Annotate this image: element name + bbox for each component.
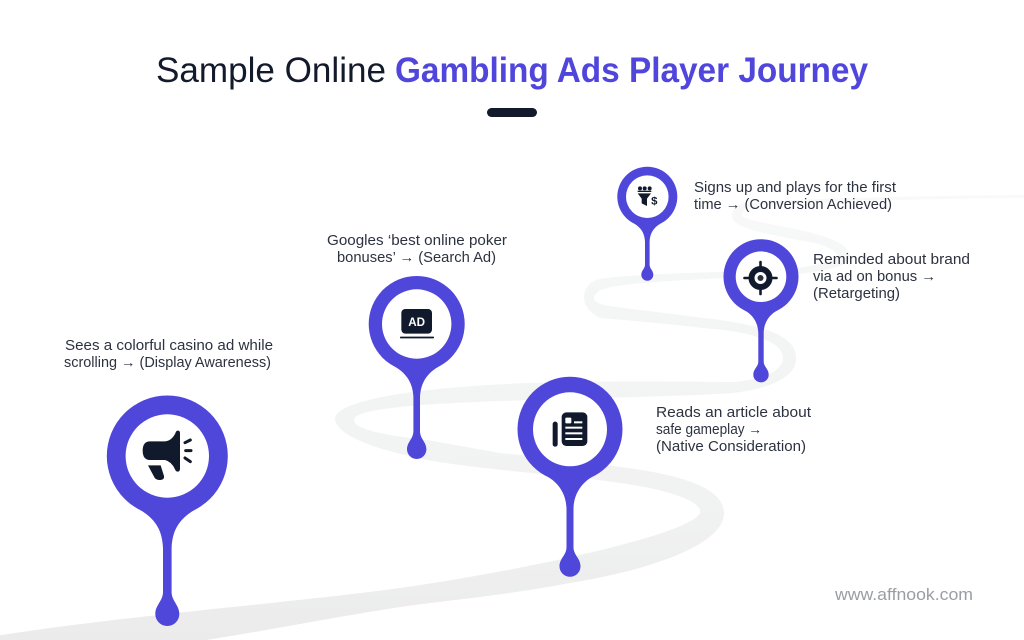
pin 3: native consideration: [518, 377, 622, 577]
title underline bar: [487, 108, 537, 117]
text: search ad: bonuses’ → (Search Ad): [337, 250, 496, 266]
pin 2: search ad: [369, 276, 465, 459]
text: display awareness: scrolling → (Display Awareness): [64, 355, 271, 371]
icon: newspaper: [553, 412, 587, 447]
text: display awareness: Sees a colorful casino ad while: [65, 338, 273, 354]
text: search ad: [327, 233, 507, 266]
icon: AD laptop: AD: [408, 316, 425, 329]
pin 4: conversion: [617, 167, 677, 281]
icon: target: [744, 262, 776, 294]
text: retargeting: [813, 252, 970, 302]
title: [156, 51, 868, 90]
title: Sample Online: [156, 51, 386, 90]
title: Gambling Ads Player Journey: [395, 51, 868, 90]
icon: AD laptop: [400, 309, 434, 338]
text: search ad: Googles ‘best online poker: [327, 233, 507, 249]
text: retargeting: Reminded about brand: [813, 252, 970, 268]
text: conversion: Signs up and plays for the first: [694, 180, 896, 196]
text: native consideration: safe gameplay →: [656, 422, 762, 438]
icon: megaphone: [143, 431, 191, 480]
pin 5: retargeting: [724, 239, 798, 382]
text: retargeting: via ad on bonus →: [813, 269, 936, 285]
website credit: www.affnook.com: [834, 586, 973, 604]
text: conversion: [694, 180, 896, 213]
text: native consideration: Reads an article about: [656, 405, 811, 421]
text: native consideration: [656, 405, 811, 455]
icon: funnel with dollar: $: [651, 196, 658, 208]
text: native consideration: (Native Consideration): [656, 439, 806, 455]
text: display awareness: [64, 338, 273, 371]
pin 1: display awareness: [107, 396, 228, 626]
winding road background: [0, 195, 1024, 640]
text: retargeting: (Retargeting): [813, 286, 900, 302]
text: conversion: time → (Conversion Achieved): [694, 197, 892, 213]
